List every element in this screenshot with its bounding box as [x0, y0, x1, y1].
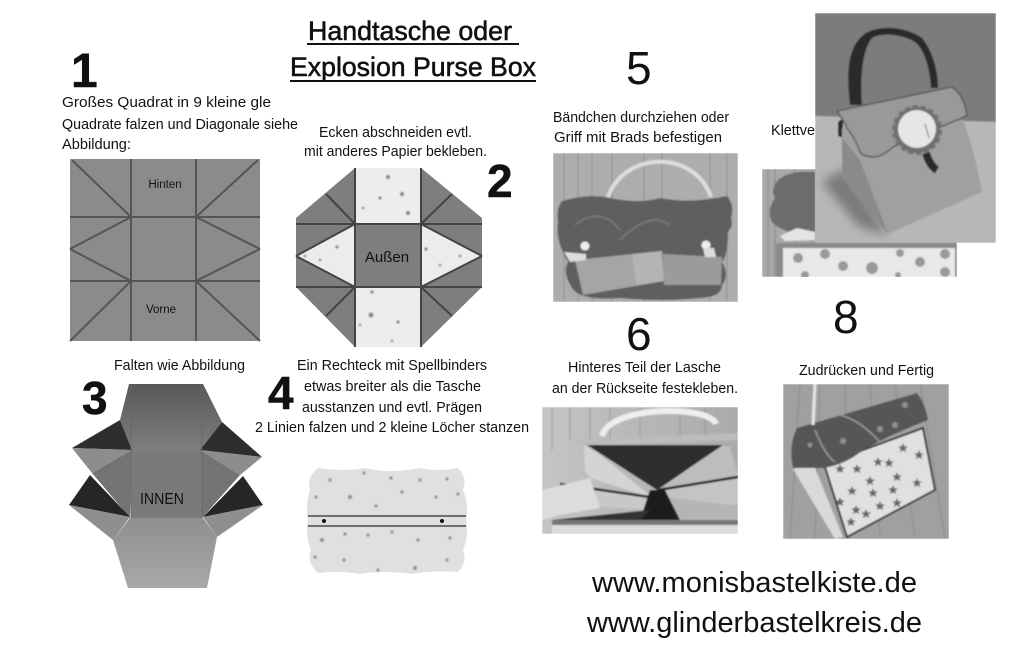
- step 5 panel: [553, 42, 738, 302]
- folded box interior diagram: [69, 384, 263, 588]
- step 1 instructions: [62, 94, 298, 153]
- photo: bag opened from behind: [542, 407, 738, 534]
- step 2 instructions: mit anderes Papier bekleben.: [304, 143, 487, 160]
- label: Hinten: Hinten: [148, 179, 182, 191]
- step number 2: 2: [487, 155, 513, 207]
- title: [290, 16, 536, 82]
- punched holes: [322, 519, 444, 523]
- website links: www.monisbastelkiste.de: [591, 567, 917, 599]
- step 2 instructions: Ecken abschneiden evtl.: [319, 124, 472, 141]
- step 1 instructions: Großes Quadrat in 9 kleine gle: [62, 94, 271, 111]
- folded square diagram: [70, 159, 260, 341]
- step 6 instructions: [552, 359, 738, 397]
- step 2 panel: [296, 124, 513, 347]
- step 1 instructions: Quadrate falzen und Diagonale siehe: [62, 116, 298, 133]
- step 8 panel: [783, 291, 949, 539]
- step 6 instructions: an der Rückseite festekleben.: [552, 380, 738, 397]
- scalloped patterned card: [307, 468, 467, 574]
- step 5 instructions: Griff mit Brads befestigen: [554, 129, 722, 146]
- step number 4: 4: [268, 367, 294, 419]
- step 5 instructions: [553, 109, 729, 146]
- step number 5: 5: [626, 42, 652, 94]
- step 8 caption: Zudrücken und Fertig: [799, 362, 934, 379]
- step 6 instructions: Hinteres Teil der Lasche: [568, 359, 721, 376]
- title: Explosion Purse Box: [290, 52, 536, 82]
- step number 6: 6: [626, 308, 652, 360]
- step number 3: 3: [82, 372, 108, 424]
- step 1 instructions: Abbildung:: [62, 136, 131, 153]
- photo: bag with velcro: [762, 169, 957, 279]
- step 3 panel: [69, 357, 263, 588]
- photo: finished patterned bag: [783, 384, 949, 539]
- title: Handtasche oder: [308, 16, 512, 46]
- step 4 instructions: Ein Rechteck mit Spellbinders: [297, 357, 487, 374]
- label: Außen: Außen: [365, 249, 409, 266]
- label: INNEN: INNEN: [140, 491, 184, 508]
- label: Vorne: Vorne: [146, 304, 176, 316]
- photo: bag with handle: [553, 153, 738, 302]
- website links: www.glinderbastelkreis.de: [586, 607, 922, 639]
- step 1 panel: [62, 45, 298, 341]
- step 7 panel: [762, 122, 957, 279]
- step 3 caption: Falten wie Abbildung: [114, 357, 245, 374]
- step 4 panel: [255, 357, 529, 574]
- step 5 instructions: Bändchen durchziehen oder: [553, 109, 729, 126]
- finished bag photo: [815, 13, 996, 243]
- step 4 instructions: 2 Linien falzen und 2 kleine Löcher stanzen: [255, 419, 529, 436]
- octagon diagram: [296, 168, 482, 347]
- step number 1: 1: [71, 45, 98, 98]
- step 4 instructions: [255, 357, 529, 436]
- step 2 instructions: [304, 124, 487, 160]
- step 4 instructions: etwas breiter als die Tasche: [304, 378, 481, 395]
- step number 8: 8: [833, 291, 859, 343]
- partly covered caption: Klettve: [771, 122, 815, 139]
- website links: [586, 567, 922, 639]
- step 6 panel: [542, 308, 738, 534]
- step 4 instructions: ausstanzen und evtl. Prägen: [302, 399, 482, 416]
